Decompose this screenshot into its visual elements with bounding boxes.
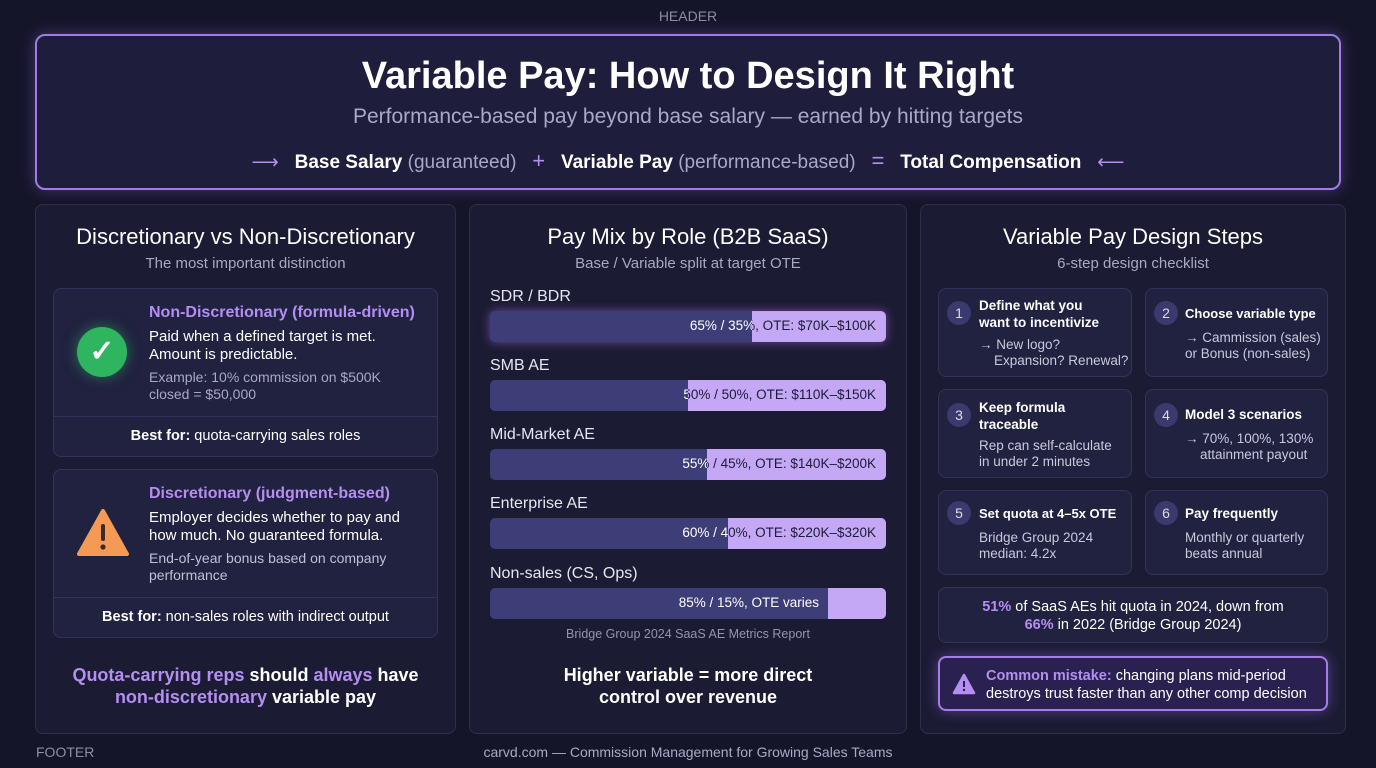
- callout: common mistake: [938, 656, 1328, 711]
- card: non-discretionary: closed = $50,000: [149, 386, 256, 402]
- panel: discretionary: Discretionary vs Non-Discretionary: [76, 224, 415, 249]
- step 2: or Bonus (non-sales): [1185, 346, 1310, 361]
- callout: common mistake: Common mistake: changing plans mid-period: [986, 668, 1286, 684]
- bar chart: 85% / 15%, OTE varies: [679, 595, 819, 610]
- step 2: [1145, 288, 1328, 377]
- callout: [72, 665, 419, 707]
- bar chart: Non-sales (CS, Ops): [490, 565, 638, 582]
- bar chart: Mid-Market AE: [490, 426, 595, 443]
- step 1: → New logo?: [979, 337, 1060, 352]
- card: non-discretionary: Paid when a defined target is met.: [149, 328, 376, 345]
- panel: steps: 6-step design checklist: [1057, 255, 1209, 272]
- step 3: in under 2 minutes: [979, 454, 1090, 469]
- header box: [35, 34, 1341, 190]
- step 4: Model 3 scenarios: [1185, 407, 1302, 422]
- panel: steps: [920, 204, 1346, 734]
- callout: pay mix: Higher variable = more direct: [564, 665, 812, 685]
- stat box: 66% in 2022 (Bridge Group 2024): [1025, 617, 1241, 633]
- card: non-discretionary: [53, 288, 438, 457]
- footer label: FOOTER: [36, 744, 94, 760]
- callout: common mistake: destroys trust faster than any other comp decision: [986, 686, 1307, 702]
- panel: discretionary: The most important distinction: [145, 255, 346, 272]
- panel: pay mix: [469, 204, 907, 734]
- card: discretionary: how much. No guaranteed formula.: [149, 527, 383, 544]
- bar chart: SDR / BDR: [490, 288, 571, 305]
- step 6: Pay frequently: [1185, 506, 1278, 521]
- bar chart: 50% / 50%, OTE: $110K–$150K: [688, 387, 876, 402]
- step 4: [1145, 389, 1328, 478]
- source note: Bridge Group 2024 SaaS AE Metrics Report: [566, 627, 810, 641]
- callout: Quota-carrying reps should always have: [72, 665, 419, 685]
- stat box: [938, 587, 1328, 643]
- card: discretionary: [53, 469, 438, 638]
- step 3: Rep can self-calculate: [979, 438, 1112, 453]
- bar chart: [484, 288, 892, 619]
- equation: ⟶ Base Salary (guaranteed) + Variable Pay (performance-based) = Total Compensation ⟵: [252, 148, 1124, 173]
- subtitle: Performance-based pay beyond base salary — earned by hitting targets: [353, 105, 1023, 128]
- callout: pay mix: control over revenue: [599, 687, 777, 707]
- panel: pay mix: Base / Variable split at target OTE: [575, 255, 801, 272]
- step 4: 4: [1162, 407, 1170, 423]
- card: non-discretionary: Non-Discretionary (formula-driven): [149, 304, 415, 321]
- step 5: Set quota at 4–5x OTE: [979, 506, 1116, 521]
- step 3: traceable: [979, 417, 1038, 432]
- step 6: 6: [1162, 505, 1170, 521]
- card: discretionary: performance: [149, 567, 228, 583]
- step 5: 5: [955, 505, 963, 521]
- bar chart: 60% / 40%, OTE: $220K–$320K: [682, 525, 876, 540]
- step 6: beats annual: [1185, 546, 1262, 561]
- step 3: 3: [955, 407, 963, 423]
- step 2: 2: [1162, 305, 1170, 321]
- callout: pay mix: [564, 665, 812, 707]
- icon: check: [77, 327, 127, 377]
- step 5: median: 4.2x: [979, 546, 1056, 561]
- footer text: carvd.com — Commission Management for Growing Sales Teams: [483, 744, 892, 760]
- step 5: Bridge Group 2024: [979, 530, 1093, 545]
- card: non-discretionary: Example: 10% commission on $500K: [149, 369, 381, 385]
- step 4: → 70%, 100%, 130%: [1185, 431, 1313, 446]
- step 1: Expansion? Renewal?: [994, 353, 1128, 368]
- bar chart: 50% / 50%, OTE: $110K–$150K: [683, 387, 876, 402]
- card: discretionary: Employer decides whether to pay and: [149, 509, 400, 526]
- stat box: 51% of SaaS AEs hit quota in 2024, down from: [982, 599, 1284, 615]
- panel: steps: Variable Pay Design Steps: [1003, 224, 1263, 249]
- card: discretionary: End-of-year bonus based on company: [149, 550, 386, 566]
- icon: warning: [77, 508, 130, 556]
- bar chart: Enterprise AE: [490, 495, 588, 512]
- card: discretionary: Best for: non-sales roles with indirect output: [102, 609, 389, 625]
- panel: pay mix: Pay Mix by Role (B2B SaaS): [547, 224, 829, 249]
- step 2: → Cammission (sales): [1185, 330, 1321, 345]
- step 6: Monthly or quarterly: [1185, 530, 1304, 545]
- bar chart: SMB AE: [490, 357, 550, 374]
- step 1: want to incentivize: [979, 315, 1099, 330]
- step 1: 1: [955, 305, 963, 321]
- card: non-discretionary: Amount is predictable.: [149, 346, 297, 363]
- step 2: Choose variable type: [1185, 306, 1316, 321]
- card: non-discretionary: Best for: quota-carrying sales roles: [131, 428, 360, 444]
- bar chart: 65% / 35%, OTE: $70K–$100K: [690, 318, 876, 333]
- card: discretionary: Discretionary (judgment-based): [149, 485, 390, 502]
- step 1: Define what you: [979, 298, 1083, 313]
- icon: warning small: [952, 674, 976, 694]
- header label: HEADER: [659, 8, 717, 24]
- step 3: [938, 389, 1132, 478]
- bar chart: 55% / 45%, OTE: $140K–$200K: [682, 456, 876, 471]
- step 4: attainment payout: [1200, 447, 1307, 462]
- title: Variable Pay: How to Design It Right: [362, 55, 1014, 97]
- step 5: [938, 490, 1132, 575]
- panel: discretionary: [35, 204, 456, 734]
- callout: non-discretionary variable pay: [115, 687, 376, 707]
- step 1: [938, 288, 1132, 377]
- icon: check: ✓: [89, 335, 115, 368]
- step 6: [1145, 490, 1328, 575]
- step 3: Keep formula: [979, 400, 1065, 415]
